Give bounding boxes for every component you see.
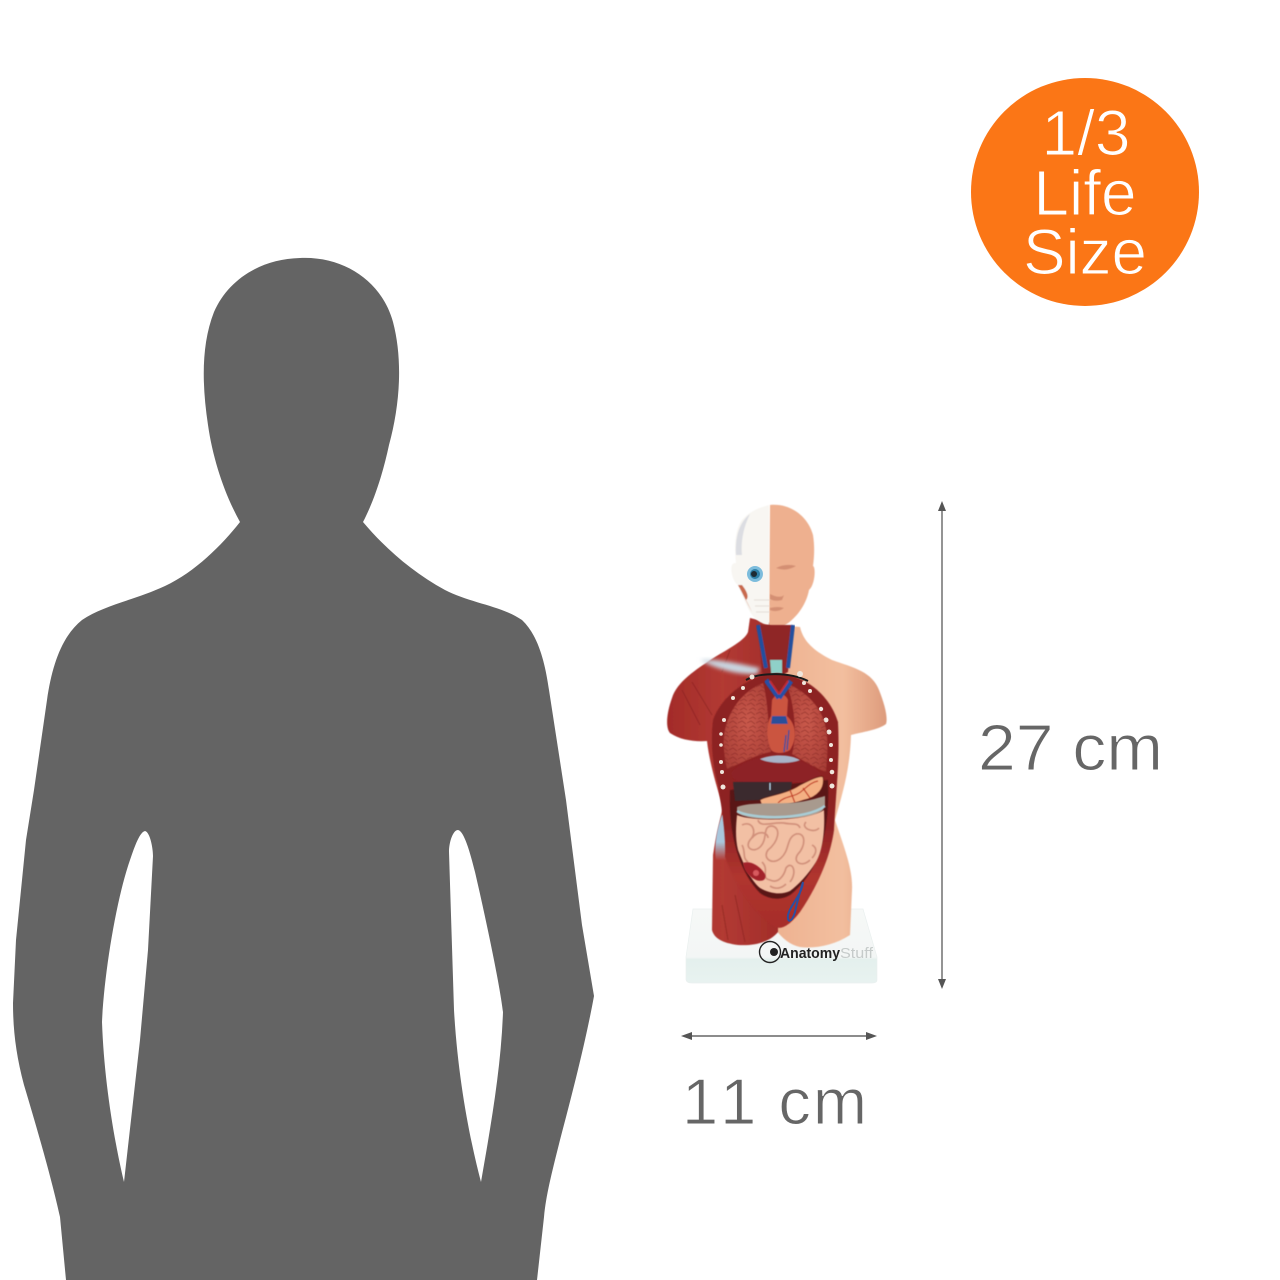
torso muscle half: [667, 618, 778, 945]
liver and diaphragm: [732, 755, 820, 782]
badge: 1/3 life size: 1/3: [1042, 97, 1130, 169]
head skin half: [769, 505, 815, 627]
anatomy torso model: [667, 505, 887, 983]
head skull half: [731, 505, 770, 625]
height dimension arrow: [938, 501, 946, 989]
dark lower cavity: [730, 780, 828, 899]
height label: 27 cm: [978, 711, 1163, 784]
pancreas: [760, 777, 823, 807]
cecum: [743, 862, 765, 881]
right lung: [786, 683, 827, 772]
display base: [686, 909, 877, 983]
eye: [747, 566, 763, 582]
stomach dark section: [733, 782, 792, 801]
small intestine: [730, 810, 824, 893]
collarbone ring and rib dots: [719, 671, 834, 790]
base logo: [760, 942, 874, 962]
left lung: [724, 683, 771, 769]
human silhouette: [13, 258, 594, 1280]
shoulder and flank pale patches: [700, 660, 760, 860]
heart: [766, 680, 795, 753]
torso skin half: [776, 625, 887, 948]
neck structures: [758, 625, 793, 682]
width dimension arrow: [681, 1032, 877, 1040]
badge: 1/3 life size: Life: [1033, 157, 1137, 229]
chest and abdominal cavity wall: [712, 673, 839, 928]
badge: 1/3 life size: Size: [1023, 216, 1147, 288]
omentum band: [737, 796, 825, 819]
width label: 11 cm: [682, 1065, 867, 1138]
badge: 1/3 life size: [971, 78, 1199, 306]
iliac vessels: [788, 882, 803, 921]
base logo: Anatomy: [780, 945, 841, 962]
base logo: Stuff: [840, 945, 874, 962]
